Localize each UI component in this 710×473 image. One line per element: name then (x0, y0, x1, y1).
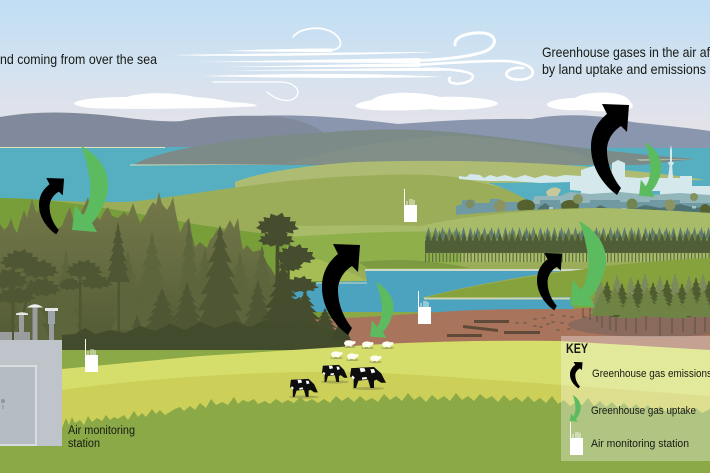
sheep (330, 340, 394, 363)
suburb houses and trees (456, 192, 710, 217)
uptake arrow: plantation (570, 221, 606, 307)
building door (0, 366, 36, 445)
key uptake arrow (570, 395, 581, 422)
uptake arrow: sea forest (72, 146, 108, 232)
key station label: Air monitoring station (591, 438, 689, 450)
emission arrow: meadow (322, 244, 360, 335)
air monitoring station label (68, 425, 135, 450)
far mountains (0, 112, 710, 170)
meadow (62, 341, 710, 460)
key station icon (570, 422, 583, 455)
rolling green hills (0, 193, 710, 320)
key emission arrow (570, 362, 583, 388)
air monitoring station label: Air monitoring (68, 425, 135, 437)
forest: dark ground (62, 320, 345, 350)
uptake arrow: meadow (370, 282, 393, 338)
key uptake label: Greenhouse gas uptake (591, 405, 696, 417)
city skyline and bay (459, 145, 710, 205)
emission arrow: clearing (537, 253, 562, 310)
air monitoring station building (0, 304, 62, 446)
mid-lake small conifer (331, 312, 351, 340)
emission arrow: city (591, 104, 629, 195)
shoreline (0, 147, 165, 148)
forest: olive back skyline (0, 192, 315, 345)
forest: big pines (256, 213, 340, 338)
right forest clearing shadow (568, 313, 710, 337)
conifer plantation (425, 233, 710, 262)
uptake arrow: city (639, 142, 661, 197)
foreground grass (0, 393, 710, 473)
right young forest (583, 273, 710, 336)
conifer plantation back row (425, 227, 710, 242)
sea (0, 147, 710, 215)
left forest (0, 192, 345, 350)
harvested logs and stumps (447, 314, 592, 337)
building body (0, 340, 62, 446)
mid grey-green hills (130, 130, 695, 166)
right green slope (420, 258, 710, 330)
building vents (0, 304, 58, 340)
clouds (74, 92, 633, 111)
monitoring station marker: hill (404, 189, 417, 222)
sky background (0, 0, 710, 135)
key title: KEY (566, 340, 588, 356)
wind label: nd coming from over the sea (0, 51, 157, 67)
greenhouse gases label (542, 44, 710, 77)
monitoring station marker: forest edge (85, 339, 98, 372)
monitoring station marker: lake shore (418, 291, 431, 324)
forest: dark front trees (0, 222, 275, 350)
brown cleared ground (300, 300, 710, 352)
light green hills (110, 161, 710, 240)
lake (280, 269, 585, 312)
wind lines (173, 28, 533, 100)
cows (289, 365, 386, 398)
key panel (561, 336, 710, 461)
forest: mid trees (10, 218, 282, 340)
air monitoring station label: station (68, 438, 100, 450)
emission arrow: sea forest (39, 178, 64, 234)
